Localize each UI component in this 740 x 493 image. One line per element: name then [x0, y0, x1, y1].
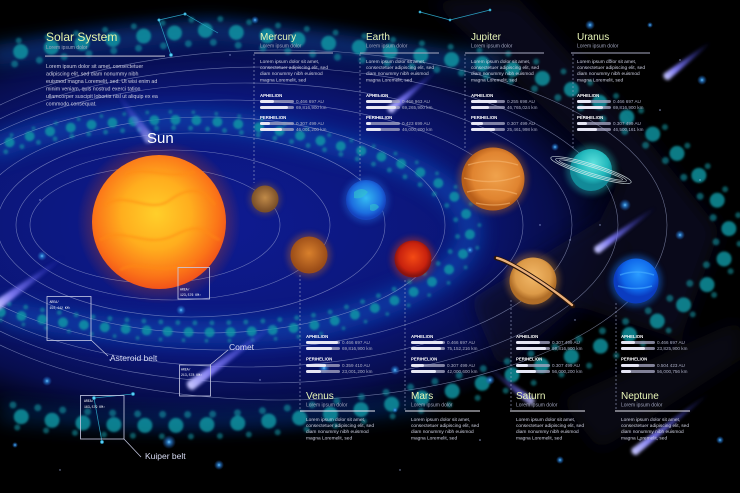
panel: Earth: 46,000,200 km: [402, 127, 433, 132]
panel: Venus: Lorem ipsum dolor: [306, 402, 348, 408]
panel: Saturn: Lorem ipsum dolor sit amet,: [516, 417, 575, 423]
callout: asteroid belt: AREA/: [50, 300, 59, 304]
panel: solar system intro: Lorem ipsum dolor: [46, 45, 88, 51]
comet: top right: [662, 39, 713, 81]
panel: Saturn: 0.307 499 AU: [552, 363, 580, 368]
panel: Saturn: 69,816,900 km: [552, 346, 583, 351]
panel: Uranus: 0.466 697 AU: [613, 99, 641, 104]
panel: Jupiter: magna Loremelit, sed: [471, 78, 517, 84]
panel: Venus: 69,816,900 km: [342, 346, 373, 351]
panel: Earth: APHELION: [366, 93, 388, 98]
panel: Venus: PERIHELION: [306, 356, 332, 362]
panel: Mercury: consectetuer adipiscing elit, sed: [260, 65, 328, 71]
panel: Mars: APHELION: [411, 334, 433, 339]
panel: Mars: Mars: [411, 391, 433, 402]
panel: Neptune: PERIHELION: [621, 356, 647, 362]
panel: Neptune: Neptune: [621, 391, 659, 402]
panel: Uranus: consectetuer adipiscing elit, sed: [577, 65, 645, 71]
panel: Venus: Venus: [306, 391, 334, 402]
panel: Venus: APHELION: [306, 334, 328, 339]
panel: Neptune: 0.466 697 AU: [657, 340, 685, 345]
panel: Mars: 0.307 499 AU: [447, 363, 475, 368]
panel: Earth: PERIHELION: [366, 115, 392, 120]
panel: Mars: [405, 280, 480, 442]
panel: Mars: PERIHELION: [411, 356, 437, 362]
planet: Uranus: [549, 145, 633, 195]
panel: Mars: 42,000,600 km: [447, 369, 478, 374]
panel: solar system intro: [45, 30, 165, 108]
panel: Saturn: Lorem ipsum dolor: [516, 402, 558, 408]
panel: Mercury: 46,001,200 km: [296, 127, 327, 132]
panel: Mars: diam nonummy nibh euismod: [411, 429, 474, 435]
panel: Uranus: diam nonummy nibh euismod: [577, 71, 640, 77]
panel: Mars: 0.466 697 AU: [447, 340, 475, 345]
intro text: [46, 64, 158, 108]
panel: Saturn: Saturn: [516, 391, 545, 402]
panel: Venus: consectetuer adipiscing elit, sed: [306, 423, 374, 429]
planet: Jupiter: [458, 144, 528, 214]
panel: Jupiter: diam nonummy nibh euismod: [471, 71, 534, 77]
panel: Saturn: [510, 300, 585, 442]
panel: Uranus: Lorem ipsum dolor: [577, 44, 619, 50]
intro text: minim veniam, quis nostrud exerci tation: [46, 86, 141, 92]
panel: Jupiter: 0.307 499 AU: [507, 121, 535, 126]
planet: Venus: [287, 233, 331, 277]
intro text: euismod magna Loremelit, sed. Ut wisi enim ad: [46, 79, 157, 85]
panel: Uranus: Uranus: [577, 32, 609, 43]
heading: Solar System: Solar System: [46, 30, 117, 44]
callout: sun area: AREA/: [180, 288, 190, 292]
comet: near comet label: [185, 316, 284, 392]
callout: asteroid belt: Asteroid belt: [110, 353, 158, 363]
panel: Jupiter: Jupiter: [471, 32, 502, 43]
constellations: [92, 9, 491, 444]
panel: Earth: Lorem ipsum dolor sit amet,: [366, 59, 425, 65]
asteroid belt dots: [0, 112, 480, 341]
panel: Earth: [360, 32, 439, 180]
panel: Mars: Lorem ipsum dolor sit amet,: [411, 417, 470, 423]
callout: sun area: 123,576 KM²: [180, 293, 201, 297]
panel: Jupiter: consectetuer adipiscing elit, sed: [471, 65, 539, 71]
panel: Mercury: 69,816,900 km: [296, 105, 327, 110]
panel: Saturn: magna Loremelit, sed: [516, 436, 562, 442]
callout: Kuiper belt: 163,579 KM²: [84, 405, 105, 409]
comet: left edge: [0, 253, 67, 312]
panel: Jupiter: Lorem ipsum dolor: [471, 44, 513, 50]
panel: Jupiter: 46,765,024 km: [507, 105, 538, 110]
intro text: adipiscing elit, sed diam nonummy nibh: [46, 72, 139, 78]
callout: comet: AREA/: [181, 368, 191, 372]
panel: Uranus: PERIHELION: [577, 115, 603, 120]
comet: upper centre: [386, 67, 440, 114]
panel: Uranus: 69,816,900 km: [613, 105, 644, 110]
panel: Mercury: Lorem ipsum dolor sit amet,: [260, 59, 319, 65]
callout: Kuiper belt: AREA/: [84, 399, 94, 403]
panel: Jupiter: 25,461,998 km: [507, 127, 538, 132]
panel: Mercury: [254, 32, 333, 183]
comet: bottom centre: [485, 364, 536, 406]
callout: Kuiper belt: Kuiper belt: [145, 451, 186, 461]
panel: Earth: 0.423 699 AU: [402, 121, 430, 126]
panel: Mercury: Mercury: [260, 32, 296, 43]
panel: Mercury: 0.466 697 AU: [296, 99, 324, 104]
panel: Earth: Lorem ipsum dolor: [366, 44, 408, 50]
intro text: commodo consequat.: [46, 102, 97, 108]
panel: Mars: consectetuer adipiscing elit, sed: [411, 423, 479, 429]
panel: Neptune: 23,825,900 km: [657, 346, 688, 351]
panel: Venus: [300, 275, 375, 442]
panel: Saturn: APHELION: [516, 334, 538, 339]
callout: comet: [180, 342, 255, 396]
panel: Earth: magna Loremelit, sed: [366, 78, 412, 84]
panel: Mercury: APHELION: [260, 93, 282, 98]
callout: comet: Comet: [229, 342, 255, 352]
panel: Mars: 75,152,216 km: [447, 346, 478, 351]
panel: Mars: magna Loremelit, sed: [411, 436, 457, 442]
planet: Saturn: [496, 253, 573, 307]
callout: Kuiper belt: [80, 396, 186, 461]
panel: Venus: 0.466 697 AU: [342, 340, 370, 345]
panel: Earth: consectetuer adipiscing elit, sed: [366, 65, 434, 71]
panel: Uranus: 46,500,161 km: [613, 127, 644, 132]
belt glow: [0, 30, 500, 421]
panel: Saturn: diam nonummy nibh euismod: [516, 429, 579, 435]
panel: Mercury: PERIHELION: [260, 115, 286, 120]
panel: Uranus: [571, 32, 650, 150]
planet: Mercury: [249, 183, 281, 215]
orbit lines: [0, 50, 667, 400]
panel: Venus: 0.359 410 AU: [342, 363, 370, 368]
callout: asteroid belt: 150,442 KM²: [50, 306, 71, 310]
callout: asteroid belt: [47, 296, 158, 363]
panel: Earth: Earth: [366, 32, 390, 43]
panel: Saturn: PERIHELION: [516, 356, 542, 362]
panel: Mercury: magna Loremelit, sed: [260, 78, 306, 84]
planet: Mars: [391, 237, 435, 281]
panel: Mercury: Lorem ipsum dolor: [260, 44, 302, 50]
panel: Jupiter: Lorem ipsum dolor sit amet,: [471, 59, 530, 65]
panel: Mercury: 0.307 499 AU: [296, 121, 324, 126]
panel: Neptune: magna Loremelit, sed: [621, 436, 667, 442]
panel: Venus: magna Loremelit, sed: [306, 436, 352, 442]
panel: Neptune: diam nonummy nibh euismod: [621, 429, 684, 435]
comet: right centre: [593, 204, 658, 255]
comet: bottom right: [630, 391, 711, 456]
panel: Jupiter: APHELION: [471, 93, 493, 98]
intro text: Lorem ipsum dolor sit amet, consectetuer: [46, 64, 143, 70]
panel: Neptune: consectetuer adipiscing elit, sed: [621, 423, 689, 429]
panel: Jupiter: PERIHELION: [471, 115, 497, 120]
panel: Uranus: APHELION: [577, 93, 599, 98]
label: Sun: Sun: [147, 130, 174, 147]
panel: Mercury: diam nonummy nibh euismod: [260, 71, 323, 77]
panel: Jupiter: 0.255 698 AU: [507, 99, 535, 104]
planet: Neptune: [610, 255, 662, 307]
callout: comet: 213,578 KM²: [181, 373, 202, 377]
panel: Uranus: Lorem ipsum dolor sit amet,: [577, 59, 636, 65]
comet: by solar system text: [111, 88, 156, 145]
panel: Uranus: magna Loremelit, sed: [577, 78, 623, 84]
panel: Mars: Lorem ipsum dolor: [411, 402, 453, 408]
panel: Neptune: 0.504 423 AU: [657, 363, 685, 368]
panel: Uranus: 0.307 499 AU: [613, 121, 641, 126]
icon: sun: [77, 140, 241, 304]
panel: Jupiter: [465, 32, 544, 150]
panel: Neptune: [615, 303, 690, 442]
panel: Venus: Lorem ipsum dolor sit amet,: [306, 417, 365, 423]
panel: Venus: 23,001,200 km: [342, 369, 373, 374]
panel: Saturn: consectetuer adipiscing elit, sed: [516, 423, 584, 429]
panel: Saturn: 56,000,200 km: [552, 369, 583, 374]
panel: Earth: 0.466 963 AU: [402, 99, 430, 104]
panel: Neptune: 56,000,756 km: [657, 369, 688, 374]
intro text: ullamcorper suscipit lobortis nisl ut aliquip ex ea: [46, 94, 158, 100]
panel: Saturn: 0.307 499 AU: [552, 340, 580, 345]
panel: Venus: diam nonummy nibh euismod: [306, 429, 369, 435]
panel: Neptune: APHELION: [621, 334, 643, 339]
planet: Earth: [343, 177, 389, 223]
callout: sun area: [178, 268, 210, 299]
panel: Earth: 69,265,900 km: [402, 105, 433, 110]
panel: Neptune: Lorem ipsum dolor sit amet,: [621, 417, 680, 423]
panel: Earth: diam nonummy nibh euismod: [366, 71, 429, 77]
panel: Neptune: Lorem ipsum dolor: [621, 402, 663, 408]
